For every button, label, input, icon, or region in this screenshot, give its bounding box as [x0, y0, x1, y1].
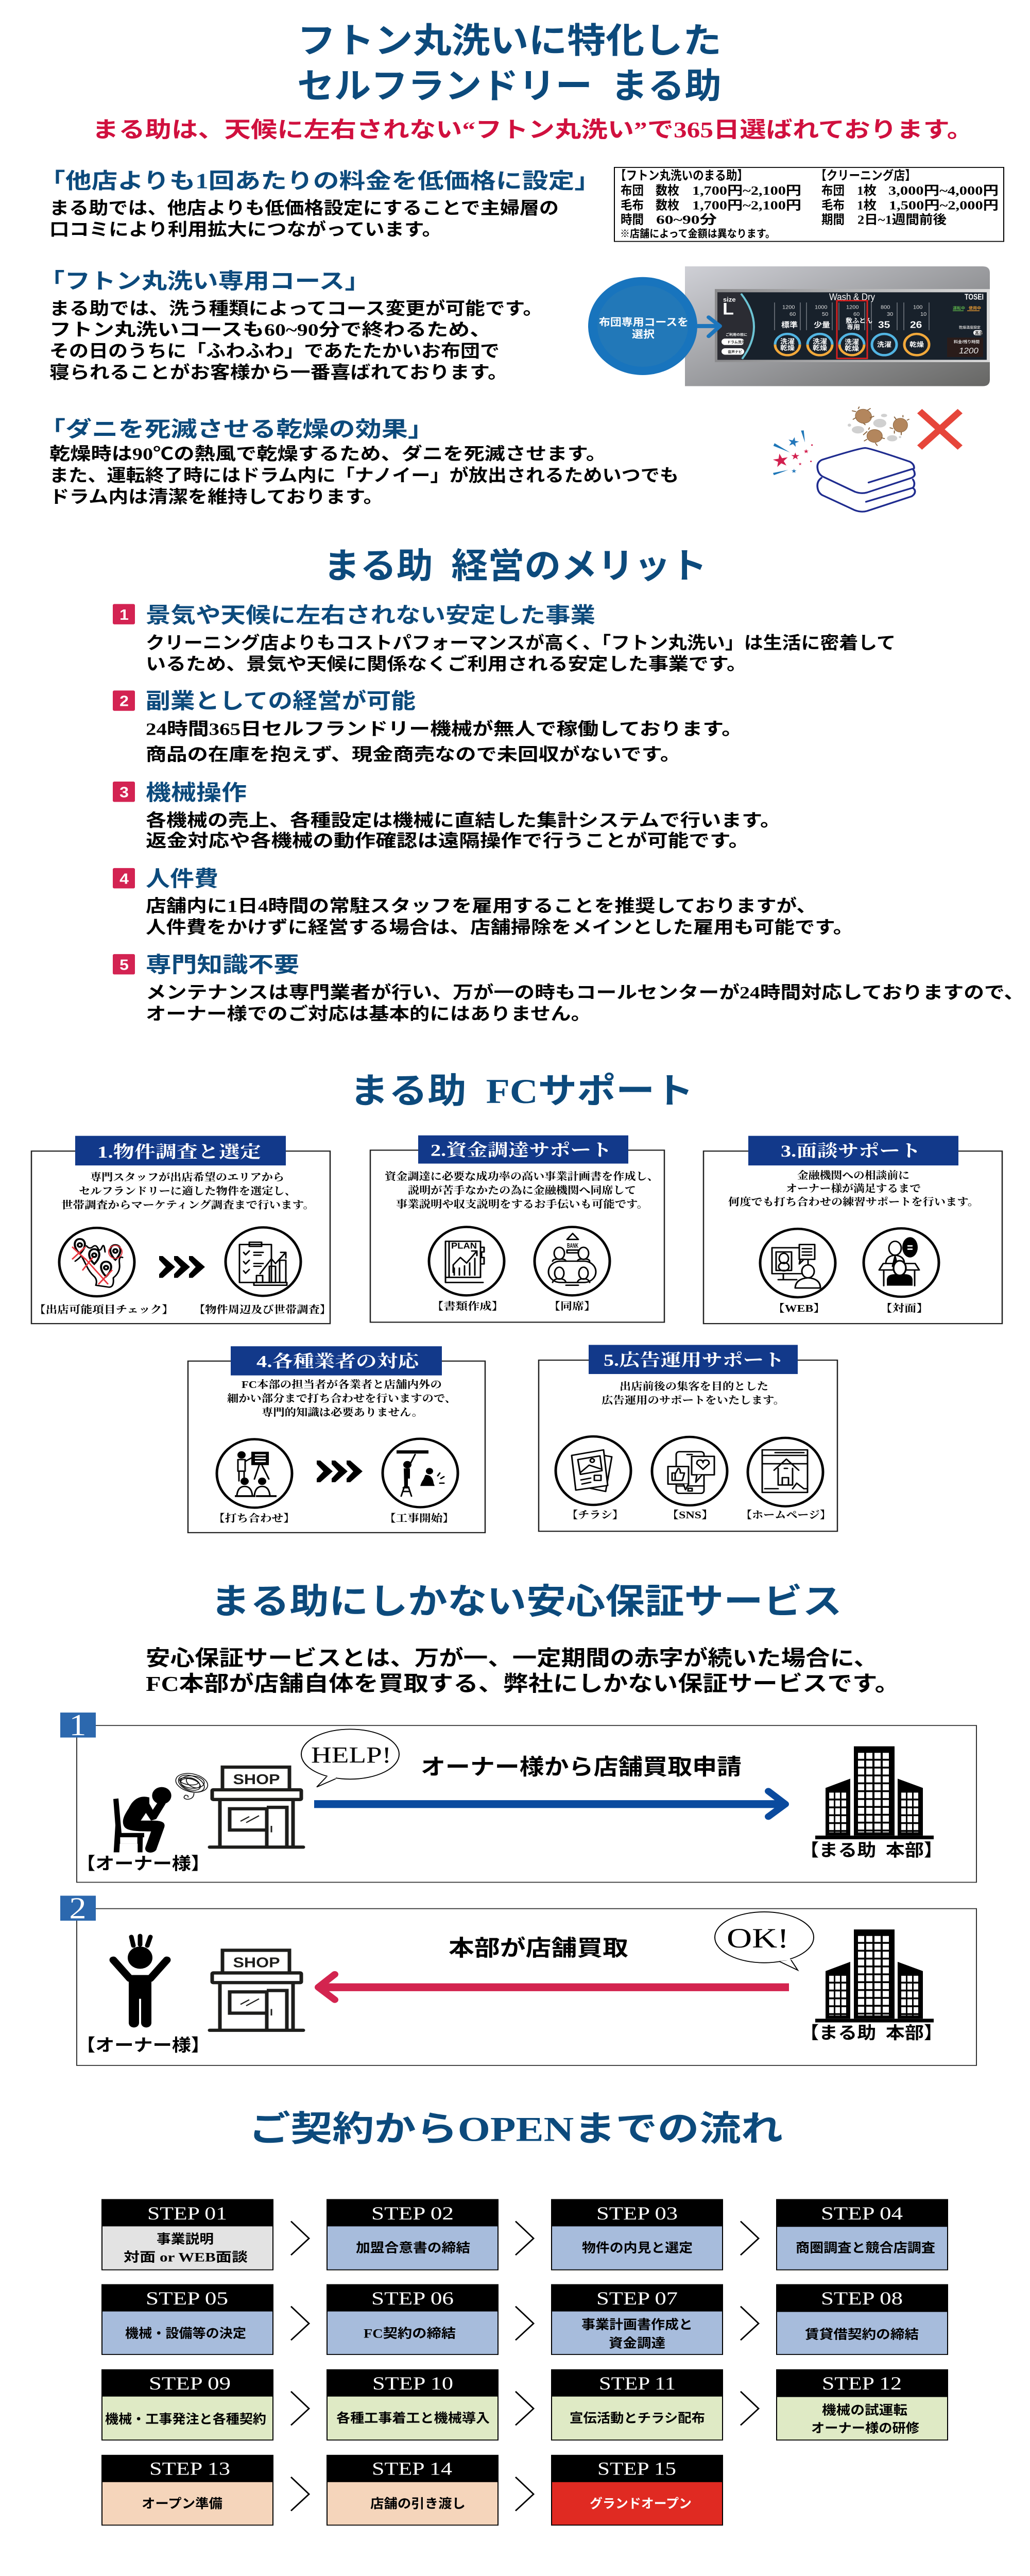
- step 05: STEP 05: [146, 2289, 228, 2309]
- title: [297, 22, 722, 106]
- panel: washing machine control: 使用中: [969, 306, 981, 310]
- text block: mite killing: [39, 417, 679, 506]
- label: documents: 【書類作成】: [432, 1300, 504, 1312]
- panel: washing machine control: 専用: [847, 324, 860, 331]
- callout: select futon course: 選択: [632, 329, 655, 340]
- body: mites: 乾燥時は90℃の熱風で乾燥するため、ダニを死滅させます。: [49, 444, 607, 464]
- panel: washing machine control: 洗濯: [845, 338, 859, 346]
- panel: price comparison table: 数枚: [656, 183, 679, 198]
- icon: flyer: [556, 1436, 631, 1505]
- merit 4: 4: [119, 871, 129, 887]
- arrow: owner to headquarters: [314, 1791, 785, 1817]
- icon: shop: SHOP: [233, 1955, 280, 1971]
- panel: washing machine control: L: [723, 300, 734, 318]
- panel: washing machine control: 洗濯: [877, 341, 891, 348]
- callout: select futon course: 布団専用コースを: [599, 317, 689, 328]
- panel: washing machine control: Wash & Dry: [829, 292, 875, 302]
- panel: washing machine control: 洗濯: [780, 337, 795, 345]
- step 14: [327, 2455, 498, 2525]
- step 01: [102, 2199, 273, 2270]
- panel: washing machine control: 乾燥: [909, 341, 924, 348]
- step 10: STEP 10: [372, 2374, 453, 2394]
- step 03: [552, 2199, 723, 2270]
- callout: ok: [715, 1912, 814, 1970]
- step 04: STEP 04: [821, 2204, 903, 2224]
- merit 5: [113, 953, 1024, 1024]
- step 08: [777, 2284, 948, 2354]
- panel: price comparison table: 1,700円~2,100円: [692, 198, 801, 212]
- icon: map check: [59, 1228, 134, 1296]
- icon: mites: [848, 406, 909, 446]
- icon: stars: [772, 430, 813, 475]
- text block: guarantee intro: FC本部が店舗自体を買取する、弊社にしかない保証サービスです。: [146, 1672, 900, 1696]
- step 14: STEP 14: [372, 2459, 452, 2479]
- panel: washing machine control: 100: [913, 305, 923, 310]
- step 02: [327, 2199, 498, 2270]
- panel: 5 advertising support: 5.広告運用サポート: [604, 1351, 784, 1369]
- panel: price comparison table: 期間: [821, 213, 845, 227]
- label: area check: 【出店可能項目チェック】: [34, 1304, 174, 1315]
- icon: meeting: [217, 1439, 292, 1507]
- panel: price comparison table: 3,000円~4,000円: [888, 183, 999, 198]
- panel: washing machine control: 1200: [846, 305, 859, 310]
- step 07: 事業計画書作成と: [581, 2317, 693, 2332]
- step 09: STEP 09: [149, 2374, 231, 2394]
- label: hq buys: 本部が店舗買取: [449, 1936, 628, 1961]
- merit 2: [113, 689, 743, 764]
- merit 1: クリーニング店よりもコストパフォーマンスが高く、「フトン丸洗い」は生活に密着して: [146, 633, 896, 653]
- panel: step 1 purchase request: [60, 1708, 976, 1883]
- label: owner: 【オーナー様】: [76, 1854, 210, 1873]
- merit 1: 景気や天候に左右されない安定した事業: [146, 603, 595, 628]
- panel: washing machine control: 乾燥: [845, 344, 860, 352]
- text block: guarantee intro: 安心保証サービスとは、万が一、一定期間の赤字が続いた場合に、: [146, 1647, 878, 1670]
- merit 3: 機械操作: [146, 781, 247, 805]
- merit 3: 返金対応や各機械の動作確認は遠隔操作で行うことが可能です。: [146, 831, 749, 851]
- icon: face to face: [864, 1228, 939, 1297]
- panel: washing machine control: 敷ふとん: [846, 317, 872, 324]
- panel: washing machine control: 標準: [781, 320, 798, 329]
- icon: shop: [210, 1950, 303, 2030]
- merit 3: [113, 781, 781, 851]
- icon: homepage: [748, 1438, 823, 1506]
- step 07: STEP 07: [596, 2289, 678, 2309]
- step 15: STEP 15: [597, 2459, 676, 2479]
- badge: 2: [60, 1891, 96, 1925]
- panel: price comparison table: 毛布: [821, 198, 845, 212]
- merit 1: [113, 603, 896, 674]
- label: attend: 【同席】: [548, 1300, 596, 1312]
- panel: price comparison table: 2日~1週間前後: [857, 213, 947, 227]
- panel: 5 advertising support: 出店前後の集客を目的とした: [620, 1381, 768, 1392]
- step 05: [102, 2284, 273, 2354]
- label: sns: 【SNS】: [666, 1509, 714, 1521]
- heading: business merits: まる助 経営のメリット: [323, 547, 707, 586]
- step 10: [327, 2370, 498, 2440]
- panel: 2 funding support: 事業説明や収支説明をするお手伝いも可能です。: [396, 1198, 648, 1210]
- panel: washing machine control: 乾燥: [813, 344, 828, 351]
- merit 2: 2: [119, 693, 129, 709]
- panel: 1 property survey: 世帯調査からマーケティング調査まで行います。: [61, 1199, 315, 1211]
- panel: 1 property survey: セルフランドリーに適した物件を選定し、: [79, 1185, 296, 1197]
- heading: futon course: 「フトン丸洗い専用コース」: [39, 269, 370, 294]
- list: business merits: [113, 603, 1024, 1024]
- panel: washing machine control: TOSEI: [965, 293, 984, 301]
- merit 1: 1: [119, 606, 129, 623]
- icon: plan book: PLAN: [451, 1241, 477, 1250]
- arrow: headquarters to owner: [318, 1974, 789, 2000]
- icon: folded futon: [817, 448, 915, 512]
- icon: shop: [210, 1767, 303, 1847]
- icon: meeting at bank: [535, 1227, 610, 1295]
- panel: 5 advertising support: [539, 1345, 837, 1531]
- panel: washing machine control: 乾燥温度設定: [959, 325, 981, 329]
- panel: washing machine control: 1200: [782, 305, 795, 310]
- flow chart: steps: [102, 2199, 948, 2525]
- label: headquarters: 【まる助 本部】: [800, 1841, 943, 1860]
- merit 1: いるため、景気や天候に関係なくご利用される安定した事業です。: [146, 654, 747, 674]
- icon: clean futon and mites: [772, 406, 960, 512]
- step 07: 資金調達: [609, 2336, 665, 2350]
- panel: 2 funding support: 2.資金調達サポート: [431, 1141, 612, 1160]
- panel: price comparison table: 【フトン丸洗いのまる助】: [615, 168, 748, 183]
- step 01: 事業説明: [157, 2232, 214, 2246]
- panel: washing machine control: 800: [881, 305, 890, 310]
- panel: price comparison table: 1枚: [857, 183, 877, 198]
- panel: 3 interview support: 何度でも打ち合わせの練習サポートを行います。: [728, 1196, 979, 1208]
- panel: price comparison table: 【クリーニング店】: [815, 168, 916, 183]
- step 01: 対面 or WEB面談: [124, 2250, 248, 2264]
- merit 3: 3: [119, 784, 129, 801]
- heading: price: 「他店よりも1回あたりの料金を低価格に設定」: [39, 169, 600, 193]
- panel: 1 property survey: [31, 1136, 331, 1324]
- panel: price comparison table: 1枚: [857, 198, 877, 212]
- panel: washing machine control: size: [723, 296, 736, 303]
- icon: checklist: [226, 1227, 301, 1296]
- panel: washing machine control: ご利用の前に: [726, 332, 747, 337]
- panel: price comparison table: 毛布: [621, 198, 644, 212]
- step 13: オープン準備: [142, 2496, 222, 2511]
- callout: help: HELP!: [311, 1742, 391, 1768]
- step 01: STEP 01: [147, 2204, 227, 2224]
- step 15: [552, 2455, 723, 2525]
- step 09: 機械・工事発注と各種契約: [105, 2412, 266, 2426]
- step 09: [102, 2370, 273, 2440]
- merit 4: 人件費: [146, 867, 218, 891]
- body: price: まる助では、他店よりも低価格設定にすることで主婦層の: [49, 198, 559, 218]
- badge: 1: 1: [69, 1708, 87, 1742]
- step 02: STEP 02: [371, 2204, 454, 2224]
- icon: web meeting: [760, 1229, 835, 1297]
- step 06: [327, 2284, 498, 2354]
- label: homepage: 【ホームページ】: [741, 1509, 831, 1521]
- merit 2: 副業としての経営が可能: [146, 689, 416, 714]
- step 08: 賃貸借契約の締結: [805, 2327, 919, 2342]
- panel: washing machine control: 運転中: [953, 306, 965, 310]
- body: futon course: まる助では、洗う種類によってコース変更が可能です。: [49, 299, 543, 318]
- panel: price comparison table: 時間: [621, 213, 644, 227]
- arrows: step connectors: [291, 2221, 759, 2511]
- icon: relieved owner: [113, 1936, 167, 2026]
- merit 4: 店舗内に1日4時間の常駐スタッフを雇用することを推奨しておりますが、: [146, 896, 817, 916]
- step 06: STEP 06: [371, 2289, 454, 2309]
- step 04: [777, 2199, 948, 2270]
- title: セルフランドリー まる助: [297, 67, 722, 106]
- panel: washing machine control: 少量: [814, 321, 830, 329]
- label: construction: 【工事開始】: [384, 1512, 454, 1524]
- body: price: [49, 198, 559, 239]
- panel: washing machine control: 60: [853, 312, 860, 317]
- heading: FC support: まる助 FCサポート: [350, 1072, 694, 1111]
- panel: washing machine control: 高温: [975, 330, 983, 335]
- body: futon course: 寝られることがお客様から一番喜ばれております。: [49, 363, 508, 382]
- body: futon course: フトン丸洗いコースも60~90分で終わるため、: [49, 320, 491, 340]
- step 12: オーナー様の研修: [811, 2421, 919, 2435]
- panel: washing machine control: 洗濯: [813, 337, 827, 345]
- body: futon course: その日のうちに「ふわふわ」であたたかいお布団で: [49, 342, 500, 361]
- panel: 2 funding support: [370, 1136, 664, 1322]
- panel: price comparison table: ※店舗によって金額は異なります。: [620, 228, 775, 240]
- panel: price comparison table: 数枚: [656, 198, 679, 212]
- step 04: 商圏調査と競合店調査: [796, 2241, 935, 2255]
- subtitle: まる助は、天候に左右されない“フトン丸洗い”で365日選ばれております。: [92, 117, 973, 142]
- callout: ok: OK!: [727, 1923, 789, 1954]
- body: mites: ドラム内は清潔を維持しております。: [49, 487, 383, 506]
- body: price: 口コミにより利用拡大につながっています。: [49, 220, 442, 239]
- merit 5: 5: [119, 957, 129, 973]
- step 11: 宣伝活動とチラシ配布: [570, 2411, 705, 2426]
- panel: 1 property survey: 専門スタッフが出店希望のエリアから: [90, 1172, 284, 1183]
- step 14: 店舗の引き渡し: [370, 2496, 466, 2511]
- panel: 2 funding support: 資金調達に必要な成功率の高い事業計画書を作成し、: [385, 1171, 659, 1182]
- body: futon course: [49, 299, 543, 382]
- title: フトン丸洗いに特化した: [297, 22, 722, 60]
- step 13: STEP 13: [149, 2459, 230, 2479]
- panel: step 2 headquarters purchase: [60, 1891, 976, 2065]
- panel: 4 contractor handling: 細かい部分まで打ち合わせを行いますので、: [227, 1393, 456, 1404]
- text block: futon course: [39, 269, 543, 382]
- icon: red cross: [920, 411, 960, 448]
- step 12: STEP 12: [822, 2374, 902, 2394]
- merit 4: 人件費をかけずに経営する場合は、店舗掃除をメインとした雇用も可能です。: [146, 918, 853, 937]
- step 06: FC契約の締結: [364, 2326, 456, 2341]
- merit 2: 商品の在庫を抱えず、現金商売なので未回収がないです。: [146, 745, 681, 764]
- callout: help: [301, 1729, 399, 1787]
- panel: washing machine control: 10: [920, 312, 926, 317]
- panel: washing machine control: 35: [878, 319, 890, 330]
- step 12: [777, 2370, 948, 2440]
- panel: price comparison table: 布団: [821, 183, 845, 198]
- panel: 5 advertising support: 広告運用のサポートをいたします。: [602, 1394, 785, 1406]
- panel: 4 contractor handling: 4.各種業者の対応: [256, 1352, 421, 1371]
- panel: 4 contractor handling: [188, 1346, 485, 1533]
- text block: guarantee intro: [146, 1647, 900, 1696]
- panel: washing machine control: 26: [910, 319, 922, 330]
- merit 5: オーナー様でのご対応は基本的にはありません。: [146, 1004, 591, 1024]
- label: face to face: 【対面】: [880, 1302, 929, 1314]
- panel: 3 interview support: オーナー様が満足するまで: [786, 1182, 921, 1194]
- panel: 3 interview support: 3.面談サポート: [781, 1142, 921, 1161]
- icon: meeting at bank: BANK: [567, 1242, 578, 1249]
- badge: 2: 2: [69, 1891, 87, 1925]
- step 03: 物件の内見と選定: [582, 2241, 693, 2255]
- callout: select futon course: [588, 277, 720, 375]
- panel: washing machine control: 1000: [815, 305, 828, 310]
- step 15: グランドオープン: [590, 2496, 692, 2511]
- panel: washing machine control: 30: [887, 312, 893, 317]
- label: area survey: 【物件周辺及び世帯調査】: [194, 1304, 331, 1315]
- icon: construction start: [383, 1439, 458, 1507]
- icon: social media: [652, 1437, 727, 1505]
- heading: guarantee service: まる助にしかない安心保証サービス: [211, 1582, 842, 1621]
- step 11: STEP 11: [599, 2374, 676, 2394]
- step 12: 機械の試運転: [822, 2403, 907, 2417]
- merit 5: 専門知識不要: [146, 953, 299, 977]
- merit 5: メンテナンスは専門業者が行い、万が一の時もコールセンターが24時間対応しておりますので、: [146, 983, 1024, 1003]
- panel: 4 contractor handling: 専門的知識は必要ありません。: [262, 1406, 423, 1418]
- panel: price comparison table: 布団: [621, 183, 644, 198]
- icon: shop: SHOP: [233, 1772, 280, 1788]
- step 02: 加盟合意書の締結: [356, 2241, 470, 2255]
- step 13: [102, 2455, 273, 2525]
- panel: price comparison table: 1,500円~2,000円: [889, 198, 999, 212]
- merit 2: 24時間365日セルフランドリー機械が無人で稼働しております。: [146, 719, 743, 739]
- label: meeting: 【打ち合わせ】: [213, 1512, 295, 1524]
- panel: price comparison table: 60~90分: [656, 213, 717, 227]
- label: owner: 【オーナー様】: [76, 2036, 210, 2055]
- icon: worried owner: [113, 1770, 210, 1853]
- step 11: [552, 2370, 723, 2440]
- heading: flow to open: ご契約からOPENまでの流れ: [249, 2110, 783, 2148]
- body: mites: また、運転終了時にはドラム内に「ナノイー」が放出されるためいつでも: [49, 466, 679, 485]
- panel: washing machine control: 音声ナビ: [728, 349, 742, 354]
- icon: chevrons: [317, 1461, 363, 1482]
- panel: washing machine control: 50: [822, 312, 828, 317]
- panel: washing machine control: 1200: [959, 347, 978, 355]
- text block: price feature: [39, 169, 600, 239]
- heading: mites: 「ダニを死滅させる乾燥の効果」: [39, 417, 434, 442]
- body: mites: [49, 444, 679, 506]
- merit 4: [113, 867, 853, 937]
- label: owner to hq: オーナー様から店舗買取申請: [421, 1755, 742, 1780]
- step 07: [552, 2284, 723, 2354]
- step 03: STEP 03: [596, 2204, 678, 2224]
- badge: 1: [60, 1708, 96, 1742]
- panel: price comparison table: 1,700円~2,100円: [692, 183, 801, 198]
- panel: 1 property survey: 1.物件調査と選定: [97, 1143, 261, 1161]
- icon: headquarters building: [815, 1929, 934, 2022]
- panel: price comparison table: [614, 167, 1004, 242]
- panel: washing machine control: ドラム洗浄: [727, 340, 745, 344]
- panel: 3 interview support: [703, 1136, 1002, 1324]
- panel: washing machine control: [685, 266, 990, 386]
- label: flyer: 【チラシ】: [566, 1509, 624, 1521]
- step 08: STEP 08: [821, 2289, 903, 2309]
- panel: 3 interview support: 金融機関への相談前に: [797, 1170, 909, 1181]
- label: web: 【WEB】: [772, 1302, 826, 1314]
- panel: washing machine control: 乾燥: [780, 344, 795, 351]
- panel: washing machine control: 60: [789, 312, 796, 317]
- icon: plan book: [429, 1227, 504, 1295]
- step 05: 機械・設備等の決定: [125, 2326, 246, 2341]
- icon: headquarters building: [815, 1747, 934, 1839]
- panel: 2 funding support: 説明が苦手なかたの為に金融機関へ同席して: [408, 1184, 636, 1196]
- merit 3: 各機械の売上、各種設定は機械に直結した集計システムで行います。: [146, 811, 781, 831]
- step 10: 各種工事着工と機械導入: [336, 2411, 490, 2426]
- panel: 4 contractor handling: FC本部の担当者が各業者と店舗内外の: [242, 1379, 442, 1391]
- label: headquarters: 【まる助 本部】: [800, 2024, 943, 2042]
- icon: chevrons: [159, 1256, 205, 1278]
- panel: washing machine control: 料金/残り時間: [954, 340, 980, 344]
